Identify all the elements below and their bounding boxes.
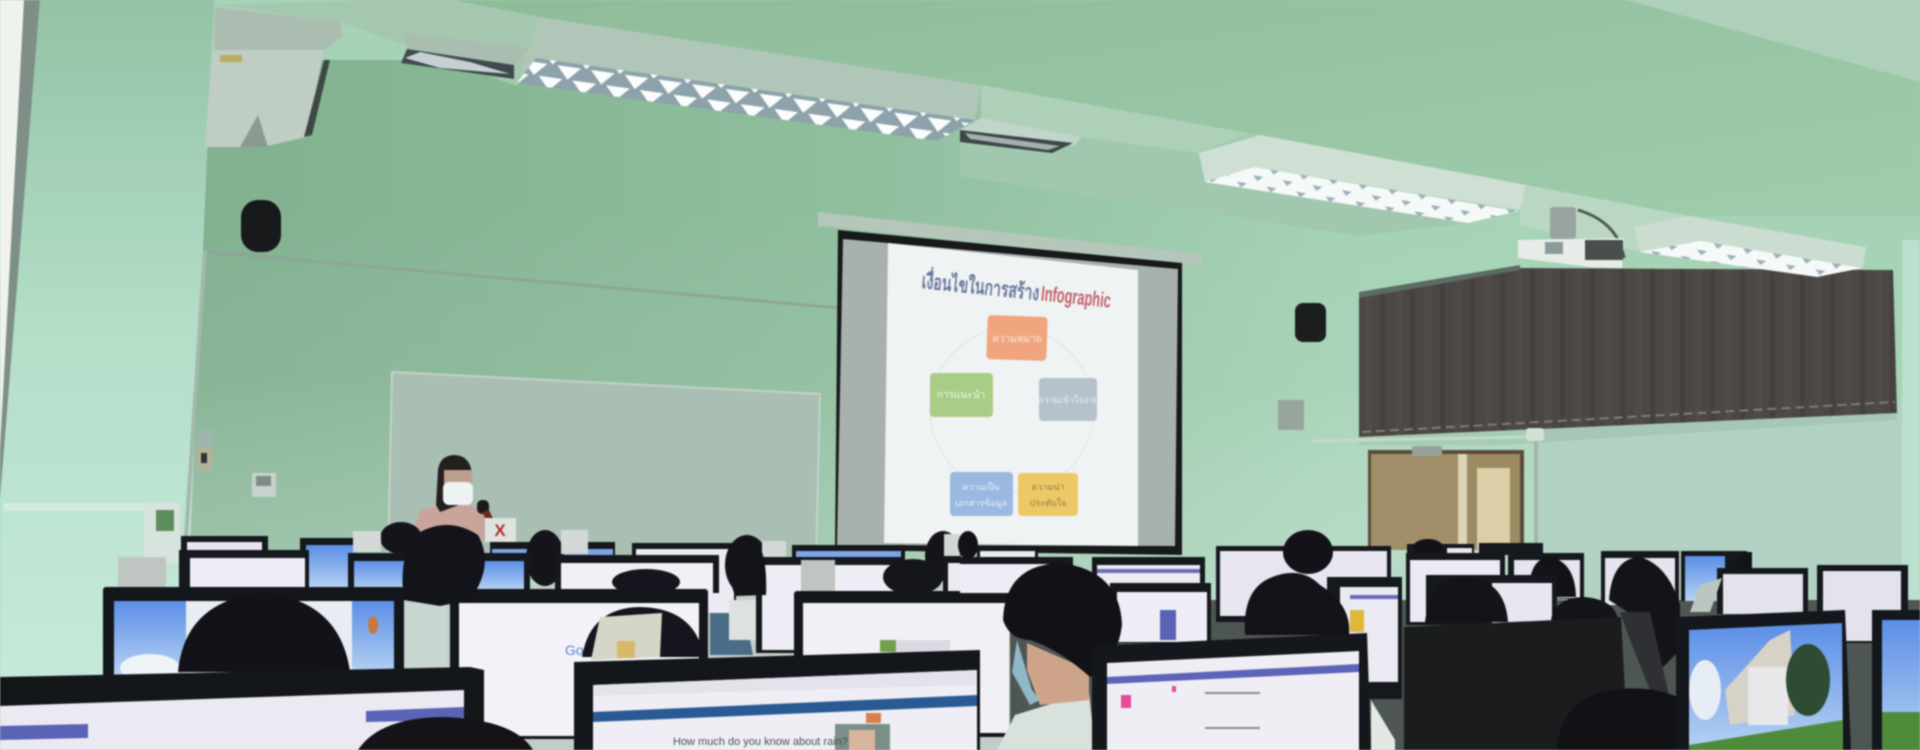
right side far students xyxy=(958,530,1752,597)
window blinds xyxy=(1359,265,1897,445)
student in shirt left xyxy=(402,525,485,667)
right side second monitors xyxy=(1110,553,1908,699)
slide ring xyxy=(930,328,1094,492)
left speaker xyxy=(241,200,281,252)
right wall xyxy=(1536,400,1920,600)
far right pillar xyxy=(1902,240,1920,620)
third monitor: google xyxy=(450,589,708,739)
front monitor: powered off xyxy=(1404,617,1628,750)
right side students xyxy=(1245,557,1680,680)
student hair front of wallpaper xyxy=(178,593,350,672)
student dark jacket xyxy=(1620,612,1670,700)
wall rail and upper panel xyxy=(186,250,1145,537)
people far left xyxy=(380,522,961,595)
slide box: impressive: ประทับใจ xyxy=(1030,498,1066,508)
window frame left xyxy=(0,0,40,500)
ceiling light 3 xyxy=(1634,216,1866,277)
front right student head xyxy=(1557,688,1726,750)
ceiling light 1 xyxy=(401,17,981,141)
beam and ceiling xyxy=(217,0,1920,252)
slide box: impressive: ความน่า xyxy=(1031,482,1065,492)
front monitor: campus wallpaper xyxy=(1676,610,1851,750)
wall pillar left xyxy=(0,0,214,680)
ceiling light 2 xyxy=(1199,135,1526,223)
third monitor: article xyxy=(794,591,1009,737)
ceiling light 3 over blinds xyxy=(1640,241,1862,277)
slide box: data: เอกสารข้อมูล xyxy=(955,498,1007,509)
second monitor row left xyxy=(179,550,973,653)
paper cards far row xyxy=(353,530,960,557)
slide box: guidance xyxy=(930,373,993,417)
right wall panel box xyxy=(1278,400,1304,430)
slide box: easy to understand xyxy=(1038,378,1098,421)
student behind chat monitor xyxy=(1371,700,1395,750)
door xyxy=(1368,446,1524,550)
whiteboard xyxy=(388,372,820,560)
projection screen xyxy=(835,230,1182,555)
thermostat xyxy=(252,473,276,497)
presenter xyxy=(411,455,496,540)
projector screen casing xyxy=(818,212,1202,266)
right speaker xyxy=(1295,303,1326,342)
slide box: guidance: การแนะนำ xyxy=(937,390,985,401)
pillar rail xyxy=(4,503,144,511)
slide title: Infographic xyxy=(1040,282,1112,313)
slide title: เงื่อนไขในการสร้าง xyxy=(921,265,1041,305)
front monitor: far right xyxy=(1872,610,1920,750)
front left monitor xyxy=(0,667,484,750)
far monitor row left xyxy=(181,536,905,613)
paper cards second row xyxy=(118,557,835,592)
front right student with mask xyxy=(997,563,1122,750)
switch plates xyxy=(197,430,213,470)
slide box: data xyxy=(950,472,1013,516)
slide box: impressive xyxy=(1018,473,1078,516)
third monitor: google: Goo xyxy=(565,642,592,658)
student with denim xyxy=(710,536,766,655)
ceiling light 1 lower louver xyxy=(960,118,1082,153)
front left student head xyxy=(358,717,533,750)
slide box: meaning: ความหมาย xyxy=(992,334,1042,345)
red X card xyxy=(485,518,516,542)
paper stand right xyxy=(1690,578,1722,612)
front wall xyxy=(150,60,1550,600)
air conditioner xyxy=(205,7,343,147)
right side far monitors xyxy=(960,543,1747,622)
wall controller xyxy=(144,503,180,563)
student and card centre xyxy=(582,569,704,660)
slide box: data: ความเป็น xyxy=(962,480,1000,492)
person with head in second row xyxy=(883,559,943,595)
desks backdrop xyxy=(184,585,1920,750)
slide box: easy to understand: ความเข้าใจง่าย xyxy=(1038,395,1098,405)
front monitor: chat xyxy=(1092,633,1371,750)
third monitor: wallpaper xyxy=(103,587,404,682)
red X card: X xyxy=(494,521,506,540)
front centre monitor: How much do you know about rain? xyxy=(673,736,848,748)
projector xyxy=(1518,207,1624,268)
slide box: meaning xyxy=(986,315,1048,361)
front centre monitor xyxy=(574,650,980,750)
conduit xyxy=(1312,428,1544,545)
